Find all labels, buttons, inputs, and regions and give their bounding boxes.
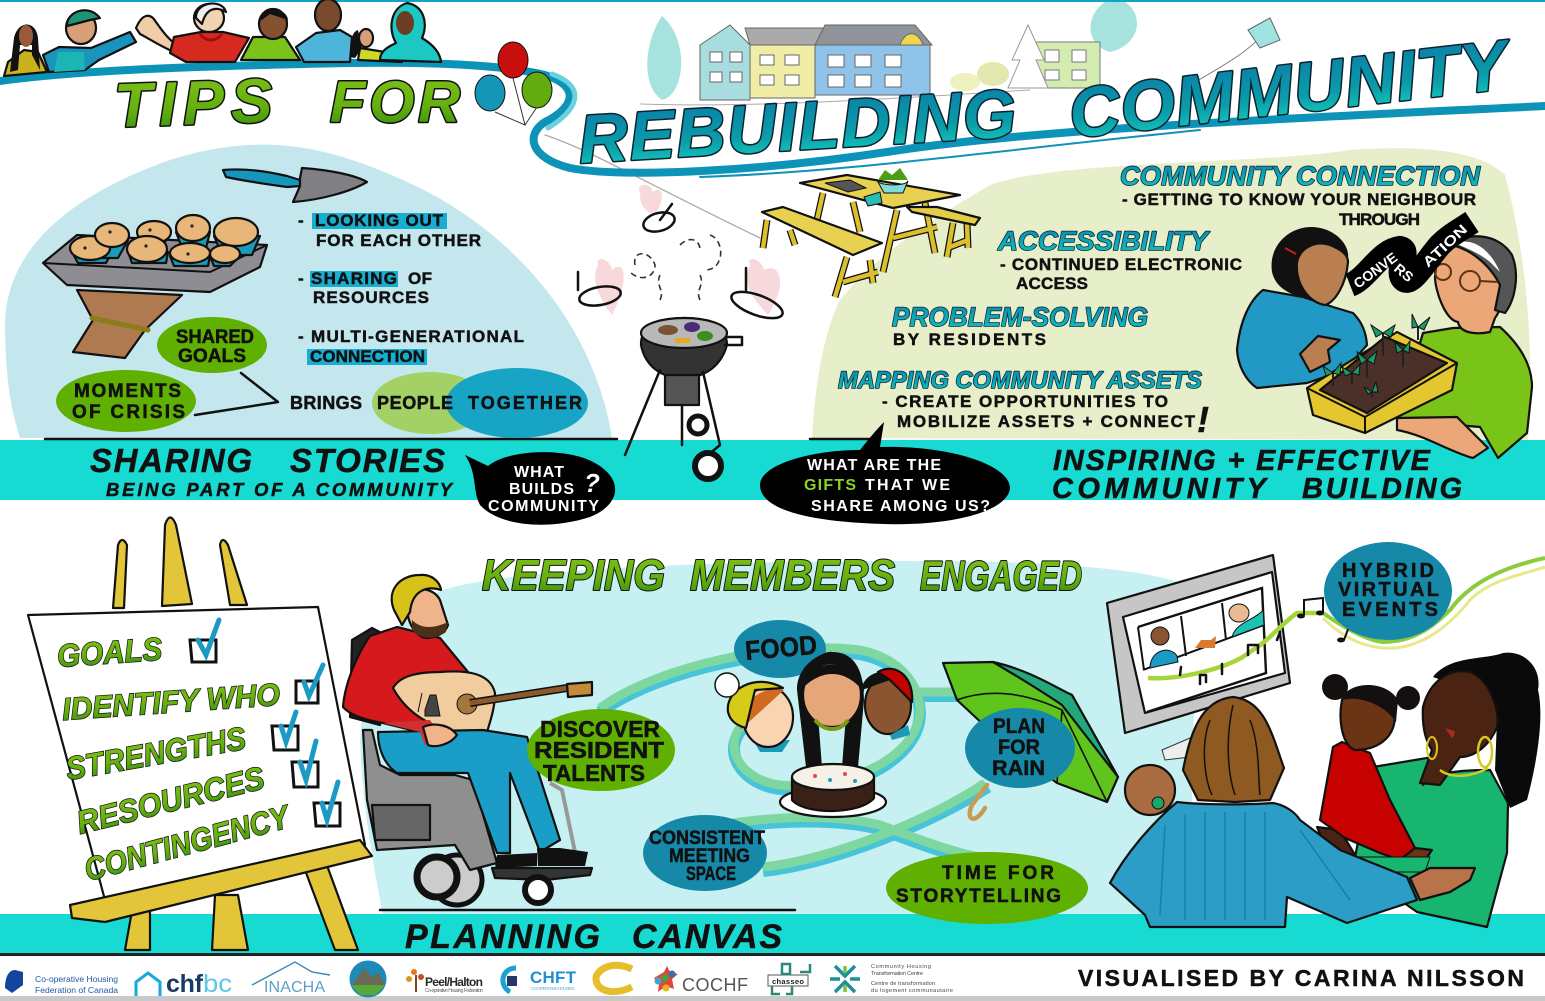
logo: peel halton: Co-operative Housing Federation xyxy=(425,988,483,994)
text block: community connection: THROUGH xyxy=(1339,210,1420,229)
banner: conversation: ATION xyxy=(1419,221,1470,270)
bubble: plan for rain: RAIN xyxy=(992,757,1045,780)
person: older woman in green xyxy=(1397,236,1532,458)
logo: chft: CO-OPERATIVE HOUSING xyxy=(531,986,575,991)
logo: community housing transformation centre: Centre de transformation xyxy=(871,981,935,987)
bubble: moments of crisis xyxy=(56,370,196,432)
band: upper teal banner xyxy=(0,440,1545,500)
illustration: three children heads xyxy=(715,652,912,767)
illustration: tray of muffins held by hand xyxy=(43,215,267,358)
logo: horseshoe emblem xyxy=(596,965,632,992)
bubble: moments of crisis: OF CRISIS xyxy=(72,402,185,423)
illustration: planning canvas easel and checklist xyxy=(28,518,372,950)
speech bubble: what builds community: ? xyxy=(584,468,600,498)
logo: chf bc xyxy=(136,970,232,998)
bubble: discover resident talents xyxy=(527,709,675,791)
logo: chasseo xyxy=(768,964,810,994)
panel: keeping members engaged blob xyxy=(360,561,1200,915)
heading: rebuilding community: REBUILDING xyxy=(576,75,1018,178)
illustration: cake xyxy=(780,764,886,817)
venn: brings people together: PEOPLE xyxy=(377,393,453,413)
heading: tips for xyxy=(113,67,460,141)
text block: community connection: COMMUNITY CONNECTION xyxy=(1120,161,1481,191)
text block: accessibility: ACCESSIBILITY xyxy=(997,226,1211,256)
bubble: consistent meeting space xyxy=(643,815,767,891)
ribbon: blue swoosh under heading xyxy=(0,63,1545,238)
footer logos xyxy=(5,960,953,998)
bubble: hybrid virtual events: VIRTUAL xyxy=(1338,579,1439,601)
speech bubble: gifts we share: GIFTS xyxy=(804,477,856,494)
illustration: trowel xyxy=(223,168,367,202)
person: girl with yellow sleeve xyxy=(350,29,403,62)
illustration: balloons xyxy=(475,42,552,125)
heading: keeping members engaged: KEEPING xyxy=(482,551,665,600)
bubble: shared goals: GOALS xyxy=(178,346,246,367)
logo: peel halton xyxy=(406,969,483,994)
bubble: consistent meeting space: MEETING xyxy=(669,846,750,867)
heading: tips for: TIPS xyxy=(113,67,273,141)
text block: planning canvas xyxy=(405,918,782,956)
heading: keeping members engaged: ENGAGED xyxy=(920,552,1082,599)
bubble: shared goals: SHARED xyxy=(176,327,254,348)
band: lower teal banner xyxy=(0,914,1545,954)
illustration: planning canvas easel and checklist: STRENGTHS xyxy=(63,720,249,787)
heading: rebuilding community xyxy=(576,25,1516,178)
logo: cochf: COCHF xyxy=(682,975,748,995)
logo: chf bc: chf xyxy=(166,970,204,998)
text block: sharing stories: SHARING xyxy=(90,442,252,479)
logo: chf bc: bc xyxy=(203,970,232,998)
illustration: picnic table xyxy=(762,168,980,297)
bubble: moments of crisis: MOMENTS xyxy=(74,381,181,402)
icon: checkboxes xyxy=(190,620,340,826)
illustration: woman with baby hugging woman with child xyxy=(1110,653,1540,927)
text block: community connection xyxy=(1120,161,1481,229)
text block: problem solving: PROBLEM-SOLVING xyxy=(892,302,1148,332)
illustration: planning canvas easel and checklist: CONTINGENCY xyxy=(80,798,295,888)
illustration: flying plates, cutlery and smoke xyxy=(578,185,786,324)
person: woman in yellow xyxy=(4,24,47,76)
bubble: discover resident talents: RESIDENT xyxy=(534,737,664,763)
text block: mapping community assets xyxy=(838,367,1209,440)
text block: left panel list: - xyxy=(298,269,304,288)
text block: inspiring and effective community building: COMMUNITY xyxy=(1052,473,1269,505)
logo: co-operative housing federation of canada: Federation of Canada xyxy=(35,985,118,995)
bubble: hybrid virtual events: HYBRID xyxy=(1342,560,1434,582)
person: woman in teal hijab xyxy=(380,3,441,62)
bubble: plan for rain: FOR xyxy=(998,736,1040,759)
person: woman in blue xyxy=(1237,227,1367,388)
text block: mapping community assets: - CREATE OPPORTUNITIES TO xyxy=(882,392,1168,411)
person: older woman in red xyxy=(136,3,249,62)
text block: mapping community assets: ! xyxy=(1197,399,1209,440)
panel: sharing stories blob xyxy=(5,145,612,438)
text block: left panel list: SHARING xyxy=(311,269,397,288)
venn: brings people together: BRINGS xyxy=(290,393,362,413)
person: girl in red xyxy=(1320,674,1432,864)
text block: left panel list: FOR EACH OTHER xyxy=(316,231,481,250)
venn: brings people together xyxy=(290,368,588,438)
text block: left panel list: RESOURCES xyxy=(313,288,429,307)
bubble: hybrid virtual events: EVENTS xyxy=(1342,599,1438,621)
illustration: planning canvas easel and checklist: GOALS xyxy=(56,631,164,674)
icon: music notes xyxy=(1297,598,1350,642)
text block: planning canvas: CANVAS xyxy=(632,918,782,956)
head: girl with braids xyxy=(797,652,864,767)
illustration: two women with seedling tray xyxy=(1237,221,1532,458)
banner: conversation: CONVE xyxy=(1350,249,1400,291)
illustration: music swoosh xyxy=(1323,558,1545,648)
illustration: planning canvas easel and checklist: IDENTIFY WHO xyxy=(61,677,281,727)
text block: sharing stories xyxy=(90,442,454,500)
logo: community housing transformation centre xyxy=(830,964,953,994)
text block: inspiring and effective community building xyxy=(1052,445,1462,505)
text block: problem solving: BY RESIDENTS xyxy=(893,330,1046,349)
bubble: discover resident talents: TALENTS xyxy=(543,760,645,786)
bubble: food: FOOD xyxy=(744,630,818,666)
logo: community housing transformation centre: Transformation Centre xyxy=(871,971,923,977)
illustration: planning canvas easel and checklist: RESOURCES xyxy=(73,759,269,841)
speech bubble: gifts we share: SHARE AMONG US? xyxy=(811,498,990,515)
text block: left panel list: - xyxy=(298,211,304,230)
logo: sachr circle xyxy=(350,960,386,998)
logo: chft xyxy=(503,968,577,992)
text block: left panel list: CONNECTION xyxy=(310,347,425,366)
logo: community housing transformation centre: du logement communautaire xyxy=(871,988,953,994)
text block: mapping community assets: MAPPING COMMUNITY ASSETS xyxy=(838,367,1202,394)
illustration: seedling tray xyxy=(1307,314,1457,433)
bubble: time for storytelling: STORYTELLING xyxy=(896,886,1061,907)
heading: keeping members engaged xyxy=(482,551,1082,600)
logo: co-operative housing federation of canada xyxy=(5,970,118,995)
bubble: discover resident talents: DISCOVER xyxy=(540,716,660,742)
bubble: hybrid virtual events xyxy=(1324,542,1452,640)
person: woman in blue with baby xyxy=(1110,697,1475,927)
heading: tips for: FOR xyxy=(330,70,460,135)
person: man in blue shirt xyxy=(296,0,352,62)
speech bubble: gifts we share: WHAT ARE THE xyxy=(807,457,941,474)
text block: sharing stories: BEING PART OF A COMMUNITY xyxy=(106,479,454,500)
text block: planning canvas: PLANNING xyxy=(405,918,600,956)
logo: cochf xyxy=(654,966,748,995)
logo: peel halton: Peel/Halton xyxy=(425,975,483,989)
text block: accessibility: ACCESS xyxy=(1016,274,1088,293)
bubble: plan for rain xyxy=(965,708,1075,788)
text block: left panel list: OF xyxy=(408,269,432,288)
person: woman in green xyxy=(1317,653,1540,927)
bubble: consistent meeting space: CONSISTENT xyxy=(649,828,765,849)
illustration: loop ribbons xyxy=(600,648,995,871)
bubble: time for storytelling xyxy=(886,852,1088,924)
text block: problem solving xyxy=(892,302,1148,349)
text block: left panel list: MULTI-GENERATIONAL xyxy=(311,327,524,346)
illustration: people holding hands xyxy=(4,0,441,76)
illustration: man in wheelchair playing guitar xyxy=(343,575,592,905)
illustration: barbecue grill xyxy=(625,318,742,479)
logo: chft: CHFT xyxy=(530,968,577,987)
bubble: consistent meeting space: SPACE xyxy=(686,864,736,885)
illustration: video call monitor xyxy=(1107,555,1323,760)
banner: conversation xyxy=(1350,221,1472,291)
logo: inacha xyxy=(252,962,330,996)
text block: left panel list: - xyxy=(298,327,304,346)
text block: sharing stories: STORIES xyxy=(290,442,445,479)
heading: keeping members engaged: MEMBERS xyxy=(690,551,895,600)
logo: inacha: INACHA xyxy=(264,979,325,996)
heading: rebuilding community: COMMUNITY xyxy=(1065,25,1516,153)
speech bubble: what builds community xyxy=(465,452,615,525)
bubble: food xyxy=(734,620,826,678)
bubble: time for storytelling: TIME FOR xyxy=(942,863,1054,884)
head: boy with red hat xyxy=(862,669,912,740)
speech bubble: what builds community: WHAT xyxy=(514,464,564,481)
text block: accessibility xyxy=(997,226,1242,293)
text block: inspiring and effective community building: INSPIRING + EFFECTIVE xyxy=(1053,445,1432,477)
text block: community connection: - GETTING TO KNOW YOUR NEIGHBOUR xyxy=(1122,190,1476,209)
person: man in green xyxy=(241,9,300,60)
bubble: shared goals xyxy=(157,317,267,373)
illustration: umbrella xyxy=(943,662,1118,819)
illustration: buildings and trees xyxy=(640,2,1280,105)
credit: visualised by carina nilsson: VISUALISED BY CARINA NILSSON xyxy=(1078,965,1524,991)
person: green haired neighbour in apron xyxy=(43,10,136,72)
venn: brings people together: TOGETHER xyxy=(468,393,582,413)
logo: community housing transformation centre: Community Housing xyxy=(871,964,931,970)
text block: inspiring and effective community building: BUILDING xyxy=(1302,473,1462,505)
connector lines to brings people together xyxy=(195,373,278,415)
bubble: plan for rain: PLAN xyxy=(993,715,1045,738)
text block: accessibility: - CONTINUED ELECTRONIC xyxy=(1000,255,1242,274)
logo: chasseo: chasseo xyxy=(772,977,804,986)
text block: left panel list: LOOKING OUT xyxy=(315,211,444,230)
speech bubble: what builds community: COMMUNITY xyxy=(488,498,599,515)
speech bubble: gifts we share xyxy=(760,422,1010,524)
head: child with yellow beanie xyxy=(715,673,793,752)
speech bubble: gifts we share: THAT WE xyxy=(865,477,950,494)
speech bubble: what builds community: BUILDS xyxy=(509,481,574,498)
text block: left panel list xyxy=(298,211,524,366)
logo: co-operative housing federation of canada: Co-operative Housing xyxy=(35,974,118,984)
panel: inspiring community building blob xyxy=(812,148,1530,440)
text block: mapping community assets: MOBILIZE ASSETS + CONNECT xyxy=(897,412,1196,431)
banner: conversation: RS xyxy=(1391,260,1417,285)
